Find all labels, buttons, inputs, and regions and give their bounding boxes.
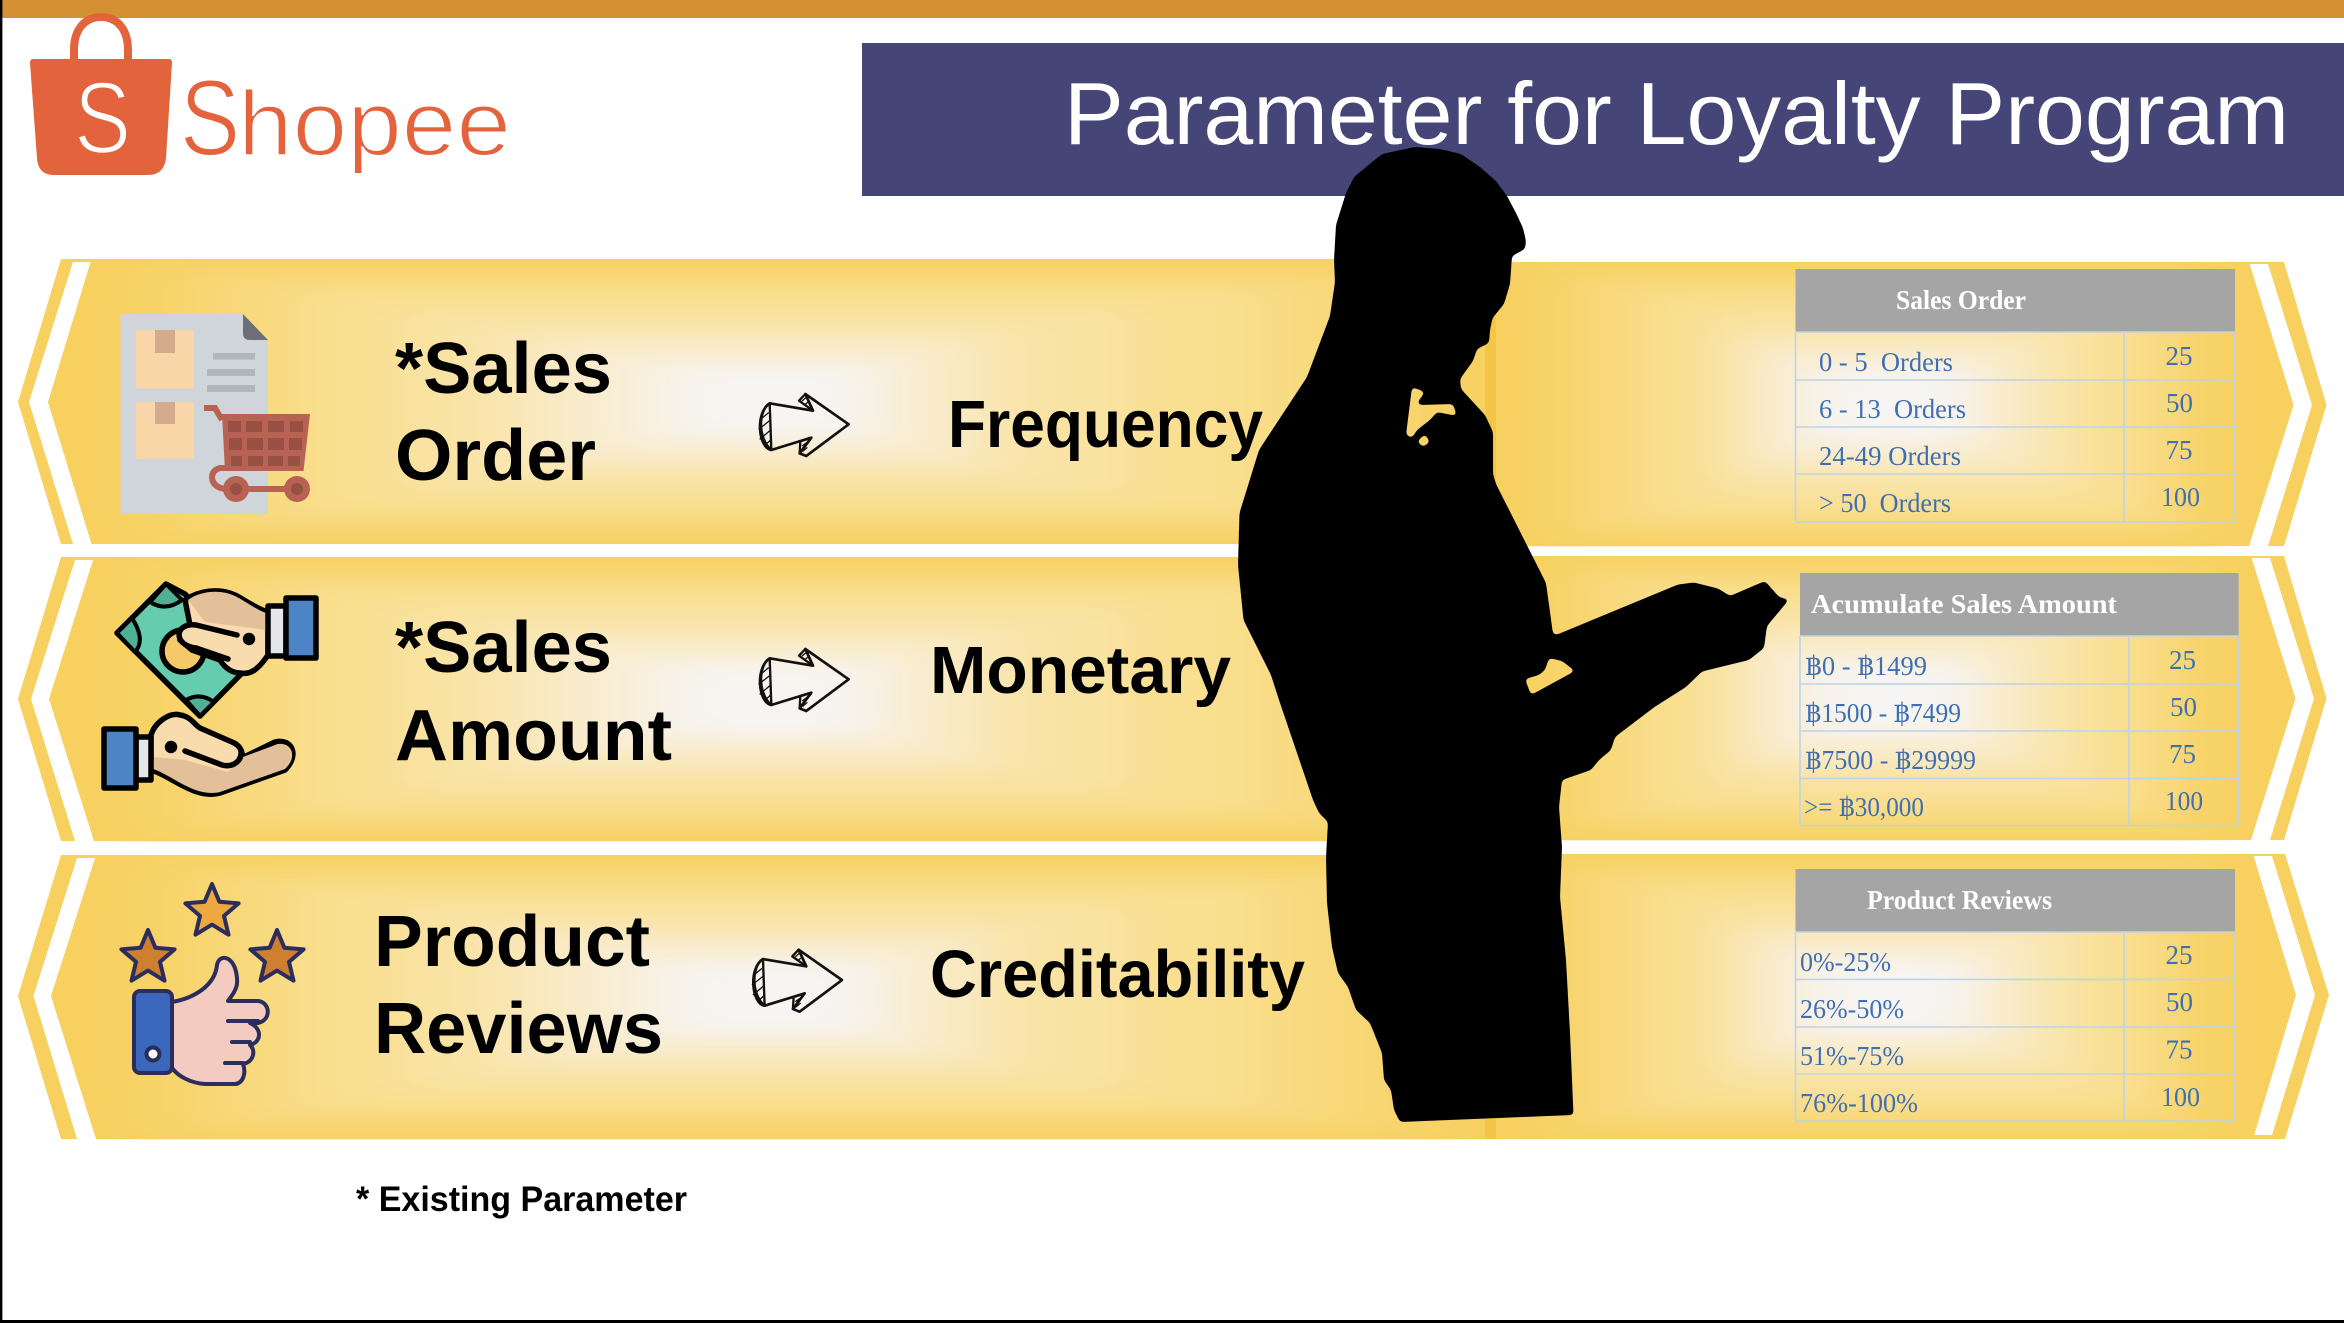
panel: sales amount (18, 556, 2326, 841)
table: sales order: 100 (2161, 482, 2200, 512)
arrow (752, 950, 842, 1012)
table: accumulate sales amount: 75 (2169, 739, 2196, 769)
table: sales order (1796, 269, 2235, 522)
title banner: Parameter for Loyalty Program (1064, 64, 2289, 163)
table: product reviews: 51%-75% (1800, 1041, 1904, 1071)
table: product reviews: 76%-100% (1800, 1088, 1918, 1118)
table: sales order: 75 (2166, 435, 2192, 465)
footnote: * Existing Parameter (356, 1180, 687, 1219)
table: accumulate sales amount: ฿0 - ฿1499 (1805, 651, 1927, 681)
result: creditability: Creditability (930, 937, 1305, 1012)
table: product reviews: 100 (2161, 1082, 2200, 1112)
banner shape (18, 556, 2326, 841)
table: product reviews: Product Reviews (1867, 885, 2052, 915)
table: product reviews (1796, 869, 2235, 1121)
label: sales order: *Sales (395, 329, 612, 409)
label: sales amount (395, 608, 672, 776)
table: sales order: Sales Order (1896, 285, 2026, 315)
icon: order document with cart (120, 314, 310, 514)
arrow (759, 394, 849, 456)
silhouette: man reading (1238, 147, 1789, 1122)
icon: hands exchanging money (104, 584, 316, 794)
title banner (862, 43, 2344, 196)
label: product reviews (374, 902, 663, 1069)
banner shape (18, 259, 2326, 546)
icon: shopping bag (30, 17, 172, 175)
result: frequency: Frequency (948, 387, 1263, 462)
label: sales order: Order (395, 416, 596, 496)
table: product reviews: 0%-25% (1800, 947, 1891, 977)
label: sales amount: *Sales (395, 608, 612, 688)
panel: sales order (18, 259, 2326, 546)
arrow (759, 649, 849, 711)
table: sales order: > 50 Orders (1819, 488, 1951, 518)
panel: product reviews (18, 854, 2329, 1139)
table: accumulate sales amount: Acumulate Sales Amount (1811, 589, 2117, 619)
table: accumulate sales amount: ฿7500 - ฿29999 (1805, 745, 1976, 775)
table: product reviews: 26%-50% (1800, 994, 1904, 1024)
table: accumulate sales amount: ฿1500 - ฿7499 (1805, 698, 1961, 728)
label: product reviews: Product (374, 902, 650, 982)
table: sales order: 0 - 5 Orders (1819, 347, 1953, 377)
label: product reviews: Reviews (374, 989, 663, 1069)
table: sales order: 24-49 Orders (1819, 441, 1961, 471)
result: monetary: Monetary (930, 633, 1231, 708)
logo: Shopee (30, 17, 511, 178)
table: accumulate sales amount (1800, 573, 2239, 826)
banner shape (18, 854, 2329, 1139)
table: accumulate sales amount: 100 (2165, 786, 2203, 816)
table: product reviews: 25 (2166, 940, 2192, 970)
table: accumulate sales amount: 25 (2169, 645, 2196, 675)
logo wordmark: S (180, 57, 240, 178)
table: sales order: 6 - 13 Orders (1819, 394, 1966, 424)
icon: thumbs up with stars (121, 884, 304, 1084)
top accent bar (2, 0, 2344, 18)
table: accumulate sales amount: 50 (2170, 692, 2197, 722)
logo wordmark: hopee (238, 73, 511, 175)
table: product reviews: 50 (2166, 987, 2193, 1017)
icon: shopping bag: S (74, 61, 131, 175)
label: sales amount: Amount (395, 696, 672, 776)
table: accumulate sales amount: >= ฿30,000 (1804, 792, 1924, 822)
table: sales order: 50 (2166, 388, 2193, 418)
table: sales order: 25 (2166, 341, 2192, 371)
table: product reviews: 75 (2166, 1035, 2192, 1065)
label: sales order (395, 329, 612, 496)
